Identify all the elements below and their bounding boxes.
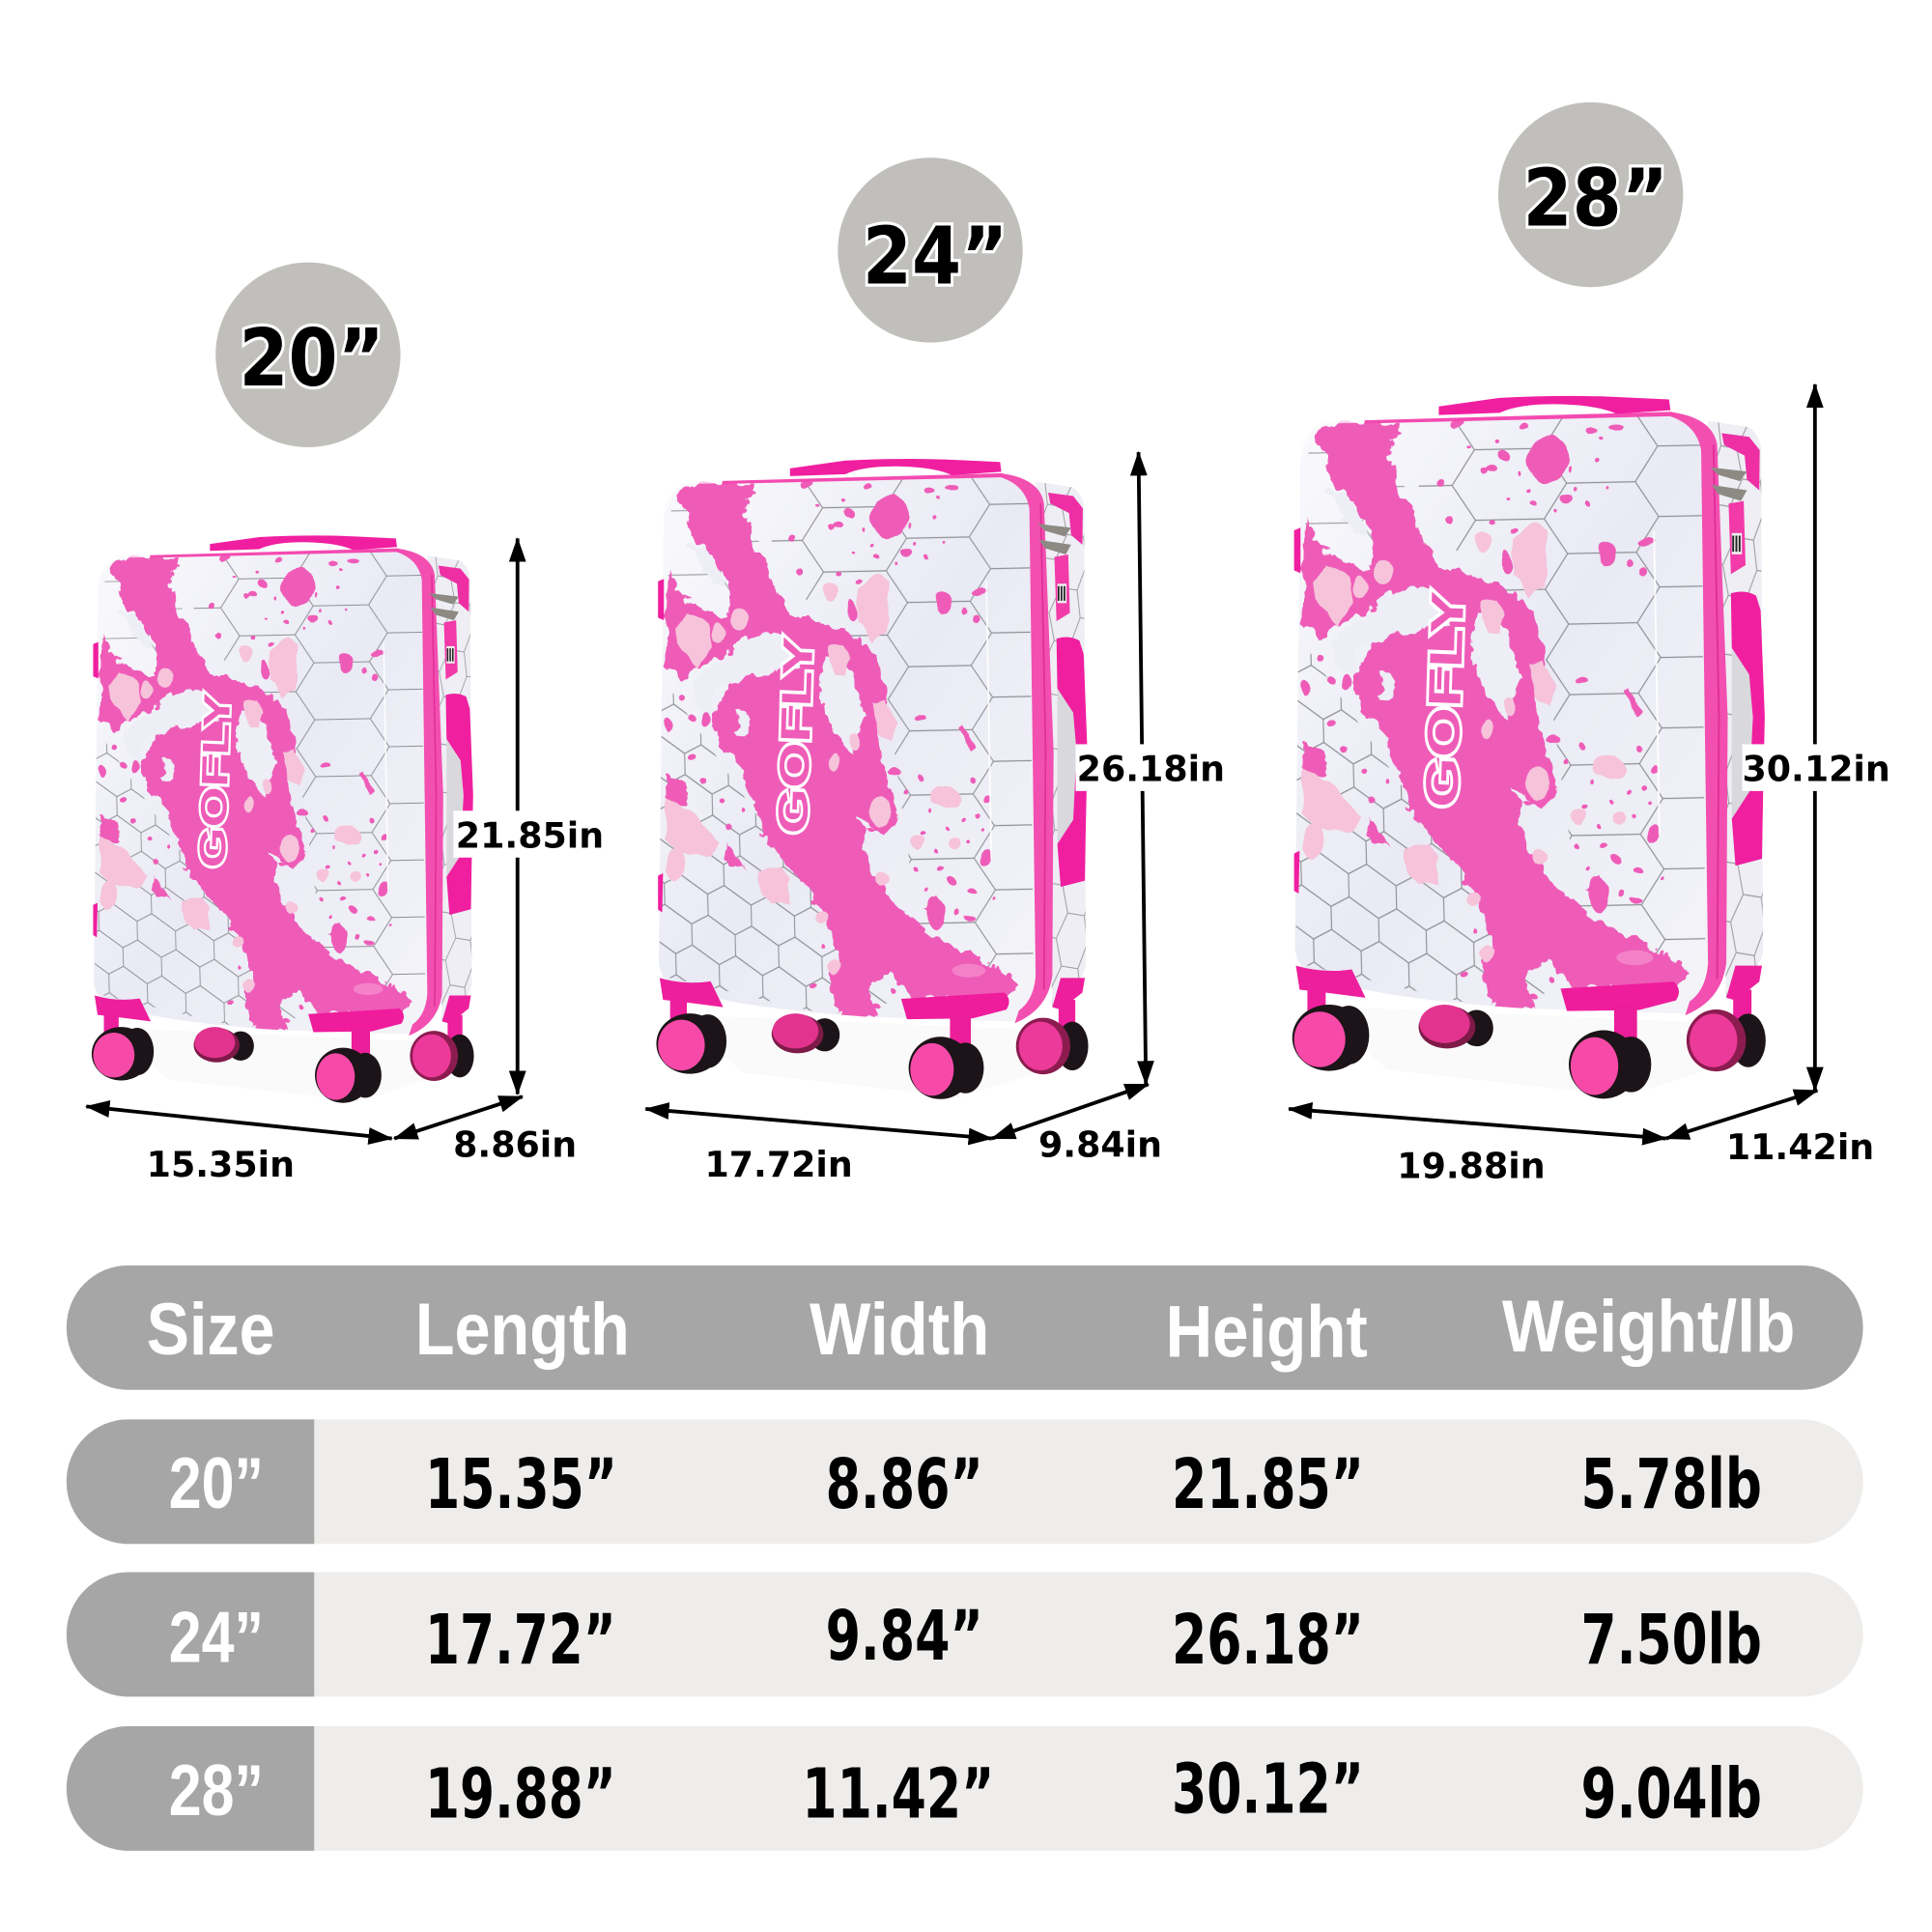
badge: 20 inch <box>215 263 401 447</box>
suitcase: 20 inch: GOFLY <box>191 692 238 868</box>
dimension arrows: 28 inch <box>1289 384 1817 1139</box>
dimension labels: 24 inch: 26.18in <box>1077 749 1225 790</box>
dimension arrows: 20 inch <box>86 538 523 1139</box>
table row: 24 inch: 7.50lb <box>1580 1600 1762 1680</box>
suitcase: 24 inch: GOFLY <box>769 636 821 835</box>
table header: Height <box>1166 1291 1368 1373</box>
dimension arrows: 24 inch <box>645 452 1149 1139</box>
table row: 28 inch: 28” <box>169 1749 264 1831</box>
table row: 20 inch: 21.85” <box>1172 1444 1364 1524</box>
table row: 28 inch: 30.12” <box>1172 1748 1364 1829</box>
table header: Weight/lb <box>1502 1286 1795 1368</box>
table header <box>67 1265 1863 1390</box>
table row: 24 inch: 24” <box>169 1597 264 1678</box>
table row: 20 inch: 20” <box>169 1442 264 1523</box>
dimension labels: 24 inch <box>704 744 1226 1185</box>
dimension labels: 28 inch <box>1397 744 1890 1186</box>
badge: 24 inch <box>838 157 1023 343</box>
badge: 28 inch: 28” <box>1523 153 1668 244</box>
dimension labels: 28 inch: 30.12in <box>1742 749 1890 790</box>
dimension labels: 20 inch: 15.35in <box>147 1144 295 1185</box>
table row: 28 inch <box>67 1726 1863 1851</box>
table row: 24 inch <box>67 1573 1863 1696</box>
dimension labels: 24 inch: 9.84in <box>1038 1124 1162 1166</box>
table header: Length <box>415 1289 630 1371</box>
dimension labels: 20 inch <box>147 810 607 1185</box>
badge: 28 inch <box>1498 102 1683 287</box>
table row: 20 inch <box>67 1419 1863 1544</box>
table row: 24 inch: 9.84” <box>826 1596 983 1676</box>
suitcase: 20 inch <box>92 535 474 1103</box>
table row: 20 inch: 8.86” <box>826 1444 983 1524</box>
table row: 28 inch: 19.88” <box>425 1753 616 1833</box>
dimension labels: 24 inch: 17.72in <box>704 1144 853 1185</box>
badge: 24 inch: 24” <box>863 211 1008 302</box>
table row: 28 inch: 11.42” <box>802 1753 994 1833</box>
suitcase: 28 inch <box>1293 396 1766 1098</box>
suitcase: 24 inch <box>656 459 1089 1099</box>
table row: 20 inch: 5.78lb <box>1580 1444 1762 1524</box>
badge: 20 inch: 20” <box>239 313 384 405</box>
table header: Width <box>810 1289 989 1371</box>
dimension labels: 28 inch: 11.42in <box>1726 1126 1874 1168</box>
dimension labels: 20 inch: 8.86in <box>453 1124 577 1166</box>
suitcase: 28 inch: GOFLY <box>1415 590 1473 809</box>
table row: 24 inch: 26.18” <box>1172 1600 1364 1680</box>
table row: 20 inch: 15.35” <box>425 1444 617 1524</box>
table row: 28 inch: 9.04lb <box>1580 1753 1762 1833</box>
dimension labels: 20 inch: 21.85in <box>456 815 604 857</box>
table row: 24 inch: 17.72” <box>425 1600 616 1680</box>
dimension labels: 28 inch: 19.88in <box>1397 1145 1546 1186</box>
table header: Size <box>147 1289 274 1371</box>
